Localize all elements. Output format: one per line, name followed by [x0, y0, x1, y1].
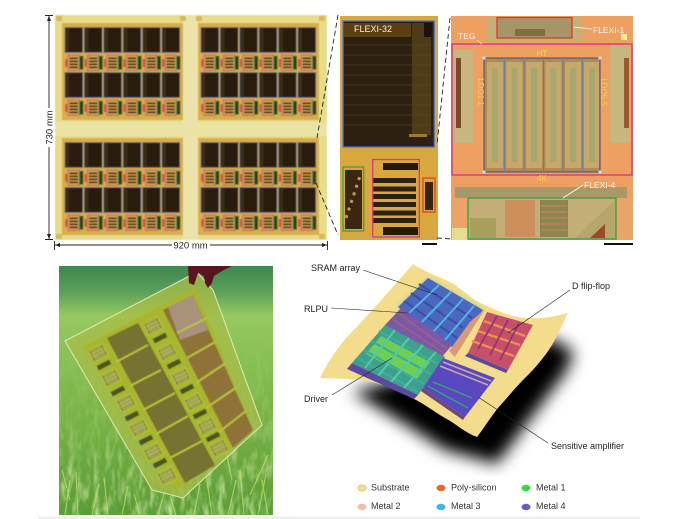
- TEG block with transistor array: [452, 44, 632, 175]
- callout: Sensitive amplifier: [478, 397, 624, 451]
- chip markings: LDO1.1: [476, 78, 485, 106]
- chip markings: LDO5.5: [599, 78, 608, 106]
- label: FLEXI-4: FLEXI-4: [584, 180, 615, 190]
- legend: [358, 482, 566, 511]
- legend: Metal 2: [358, 501, 401, 511]
- callout: D flip-flop: [508, 281, 610, 333]
- flexible substrate: [320, 264, 568, 437]
- label: FLEXI-1: FLEXI-1: [593, 25, 624, 35]
- legend: Metal 3: [436, 501, 481, 511]
- flexible memory cells: [107, 323, 215, 483]
- wafer quadrant: bottom right: [198, 138, 319, 235]
- memory block in pink: [373, 160, 419, 237]
- label: FLEXI-1: [573, 26, 624, 33]
- legend: Metal 2: Metal 2: [371, 501, 401, 511]
- label: TEG: [458, 31, 482, 44]
- wafer quadrant: bottom left: [62, 138, 183, 235]
- small circuit grids: [86, 315, 231, 487]
- height dimension arrow: [44, 16, 56, 240]
- scale bar: detail: [604, 243, 633, 245]
- printed circuit area: [82, 288, 253, 490]
- label: TEG: TEG: [458, 31, 475, 41]
- interconnect strip: [449, 309, 485, 357]
- zoom guide lines: wafer to die: [316, 15, 338, 235]
- zoom guide lines: die to detail: [437, 18, 452, 239]
- wafer quadrant: top left: [62, 23, 183, 120]
- height dimension arrow: 730 mm: [44, 110, 56, 145]
- chip markings: [476, 49, 608, 183]
- label: FLEXI-4: [563, 180, 615, 198]
- legend: Metal 3: Metal 3: [451, 501, 481, 511]
- D flip-flop block: [465, 312, 533, 373]
- FLEXI-4 block: [452, 198, 616, 240]
- callout: Driver: Driver: [304, 394, 328, 404]
- panel: die micrograph: [340, 16, 438, 240]
- callout: SRAM array: SRAM array: [311, 263, 361, 273]
- RLPU block: [385, 307, 452, 357]
- FLEXI-1 block: [497, 18, 572, 38]
- driver block in green: [343, 167, 364, 231]
- grass blades: [62, 452, 268, 515]
- scale bar: die: [422, 243, 437, 245]
- width dimension arrow: 920 mm: [173, 240, 208, 252]
- callout: D flip-flop: D flip-flop: [572, 281, 610, 291]
- legend: Substrate: Substrate: [371, 482, 410, 492]
- wafer quadrant: top right: [198, 23, 319, 120]
- panel: detail micrograph: [451, 16, 633, 240]
- legend: Metal 1: Metal 1: [536, 482, 566, 492]
- driver block: [347, 325, 445, 399]
- panel: flexible wafer photo on grass: [59, 266, 273, 515]
- grid lines between cells: [116, 318, 246, 458]
- sensitive amplifier block: [421, 358, 495, 420]
- FLEXI-32 block: [343, 21, 434, 147]
- sense block in red: [423, 178, 435, 212]
- FLEXI-32 block: FLEXI-32: [354, 24, 392, 34]
- legend: Poly-silicon: Poly-silicon: [451, 482, 497, 492]
- width dimension arrow: [54, 240, 328, 252]
- transparent film: [65, 272, 262, 498]
- legend: Metal 1: [522, 482, 566, 492]
- drop shadow: [352, 338, 574, 464]
- chip markings: 4K: [537, 174, 548, 183]
- hand holding the film: [188, 266, 232, 288]
- callout: SRAM array: [311, 263, 437, 295]
- callout: RLPU: RLPU: [304, 304, 328, 314]
- chip markings: HT: [537, 49, 547, 58]
- SRAM array block: [398, 278, 483, 347]
- callout: Driver: [304, 358, 392, 404]
- legend: Metal 4: Metal 4: [536, 501, 566, 511]
- panel: wafer photo: [55, 15, 327, 240]
- legend: Metal 4: [522, 501, 566, 511]
- callout: Sensitive amplifier: Sensitive amplifier: [551, 441, 624, 451]
- panel: 3D flexible chip illustration: [320, 264, 574, 464]
- callout: RLPU: [304, 304, 408, 314]
